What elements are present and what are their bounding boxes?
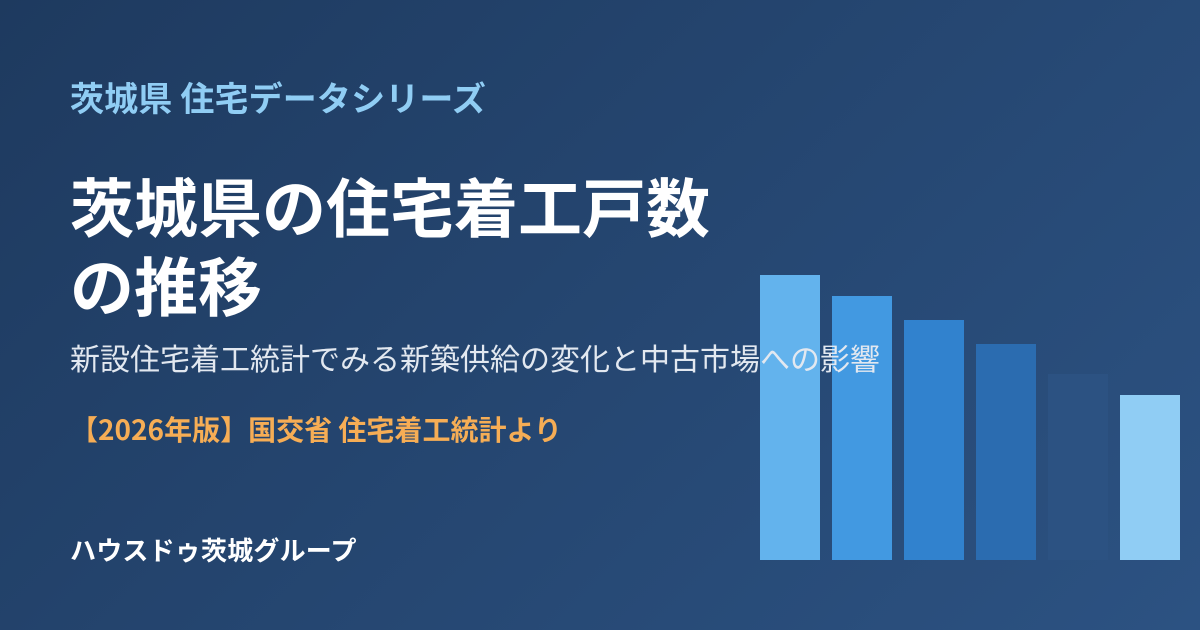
bar 2 [832,296,892,560]
title [70,159,710,330]
bar chart decoration [760,275,1180,560]
company name: ハウスドゥ茨城グループ [70,531,357,568]
bar 1 [760,275,820,560]
bar 4 [976,344,1036,560]
bar 6 [1120,395,1180,560]
title: の推移 [70,238,262,330]
subtitle: 新設住宅着工統計でみる新築供給の変化と中古市場への影響 [70,335,880,379]
edition note: 【2026年版】国交省 住宅着工統計より [70,409,562,449]
series label: 茨城県 住宅データシリーズ [70,72,486,121]
bar 5 [1048,374,1108,560]
title: 茨城県の住宅着工戸数 [70,159,710,251]
bar 3 [904,320,964,560]
